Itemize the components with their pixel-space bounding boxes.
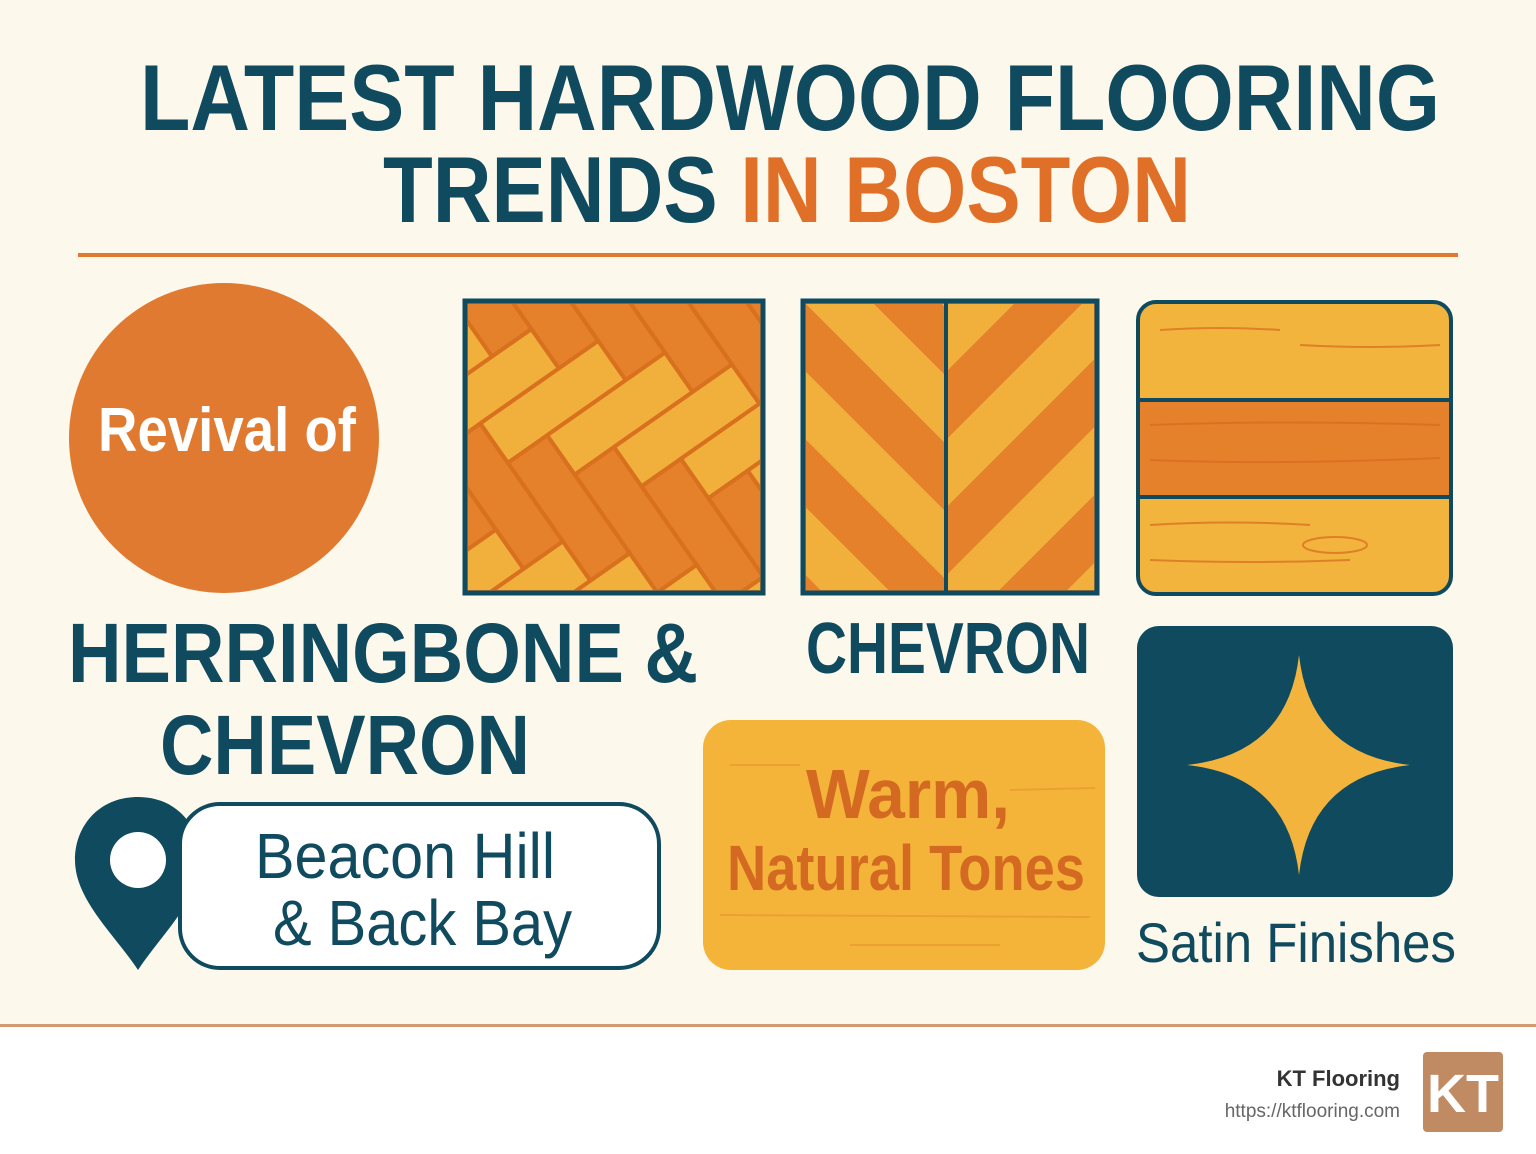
label: beacon hill & back bay: & Back Bay [273, 887, 572, 959]
panel: satin star [1137, 626, 1453, 897]
panel: warm natural tones: Natural Tones [727, 832, 1085, 904]
herringbone tile [462, 298, 766, 596]
footer: https://ktflooring.com [1225, 1101, 1400, 1122]
chevron tile [803, 301, 1097, 593]
heading: chevron: CHEVRON [806, 609, 1090, 689]
circle: revival of [69, 283, 379, 593]
label: satin finishes: Satin Finishes [1136, 911, 1456, 974]
heading: herringbone & chevron: CHEVRON [160, 698, 530, 792]
heading: herringbone & chevron: HERRINGBONE & [68, 606, 698, 700]
label: beacon hill & back bay [180, 804, 659, 968]
footer: KT Flooring [1277, 1066, 1400, 1091]
panel: warm natural tones: Warm, [806, 755, 1010, 833]
title: TRENDS IN BOSTON [383, 137, 1191, 242]
panel: warm natural tones [703, 720, 1105, 970]
circle: revival of: Revival of [98, 396, 356, 465]
footer: KT [1427, 1064, 1499, 1124]
title [140, 45, 1440, 242]
heading: herringbone & chevron [68, 606, 698, 792]
icon: location pin [75, 797, 200, 970]
label: beacon hill & back bay: Beacon Hill [255, 820, 555, 892]
plank tile [1138, 302, 1451, 594]
footer [0, 1024, 1536, 1154]
